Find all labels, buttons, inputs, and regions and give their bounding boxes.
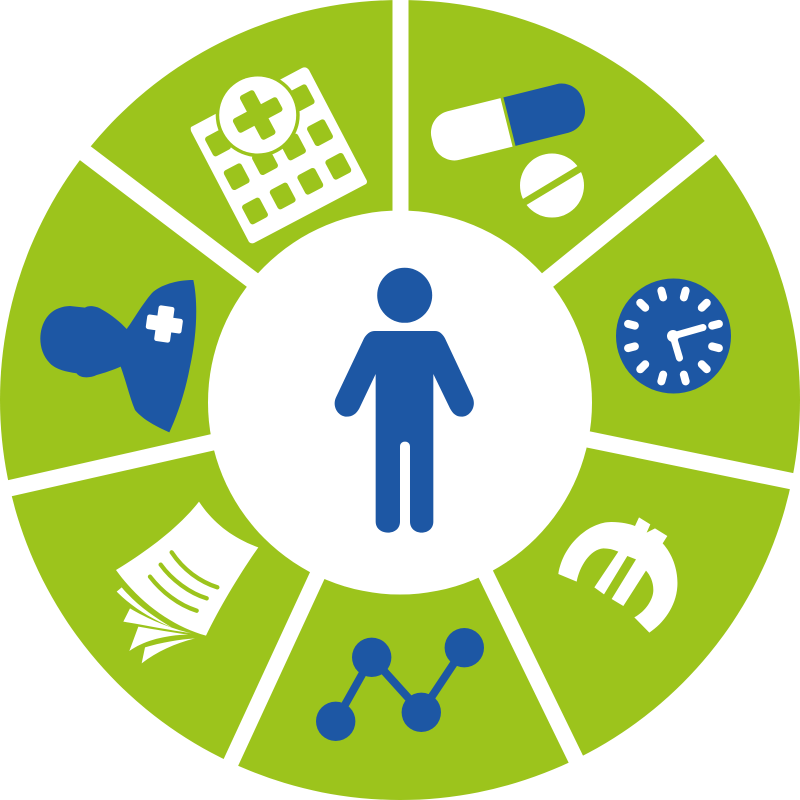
- icon: pills: [426, 79, 590, 218]
- icon: medical calendar: [191, 67, 367, 243]
- centre white circle: [208, 210, 592, 594]
- icon: line chart: [316, 628, 484, 741]
- icon: euro sign: [558, 517, 677, 633]
- icon: documents: [116, 502, 258, 663]
- icon: nurse: [40, 280, 196, 432]
- icon: clock: [616, 278, 731, 394]
- icon: person: [335, 268, 474, 533]
